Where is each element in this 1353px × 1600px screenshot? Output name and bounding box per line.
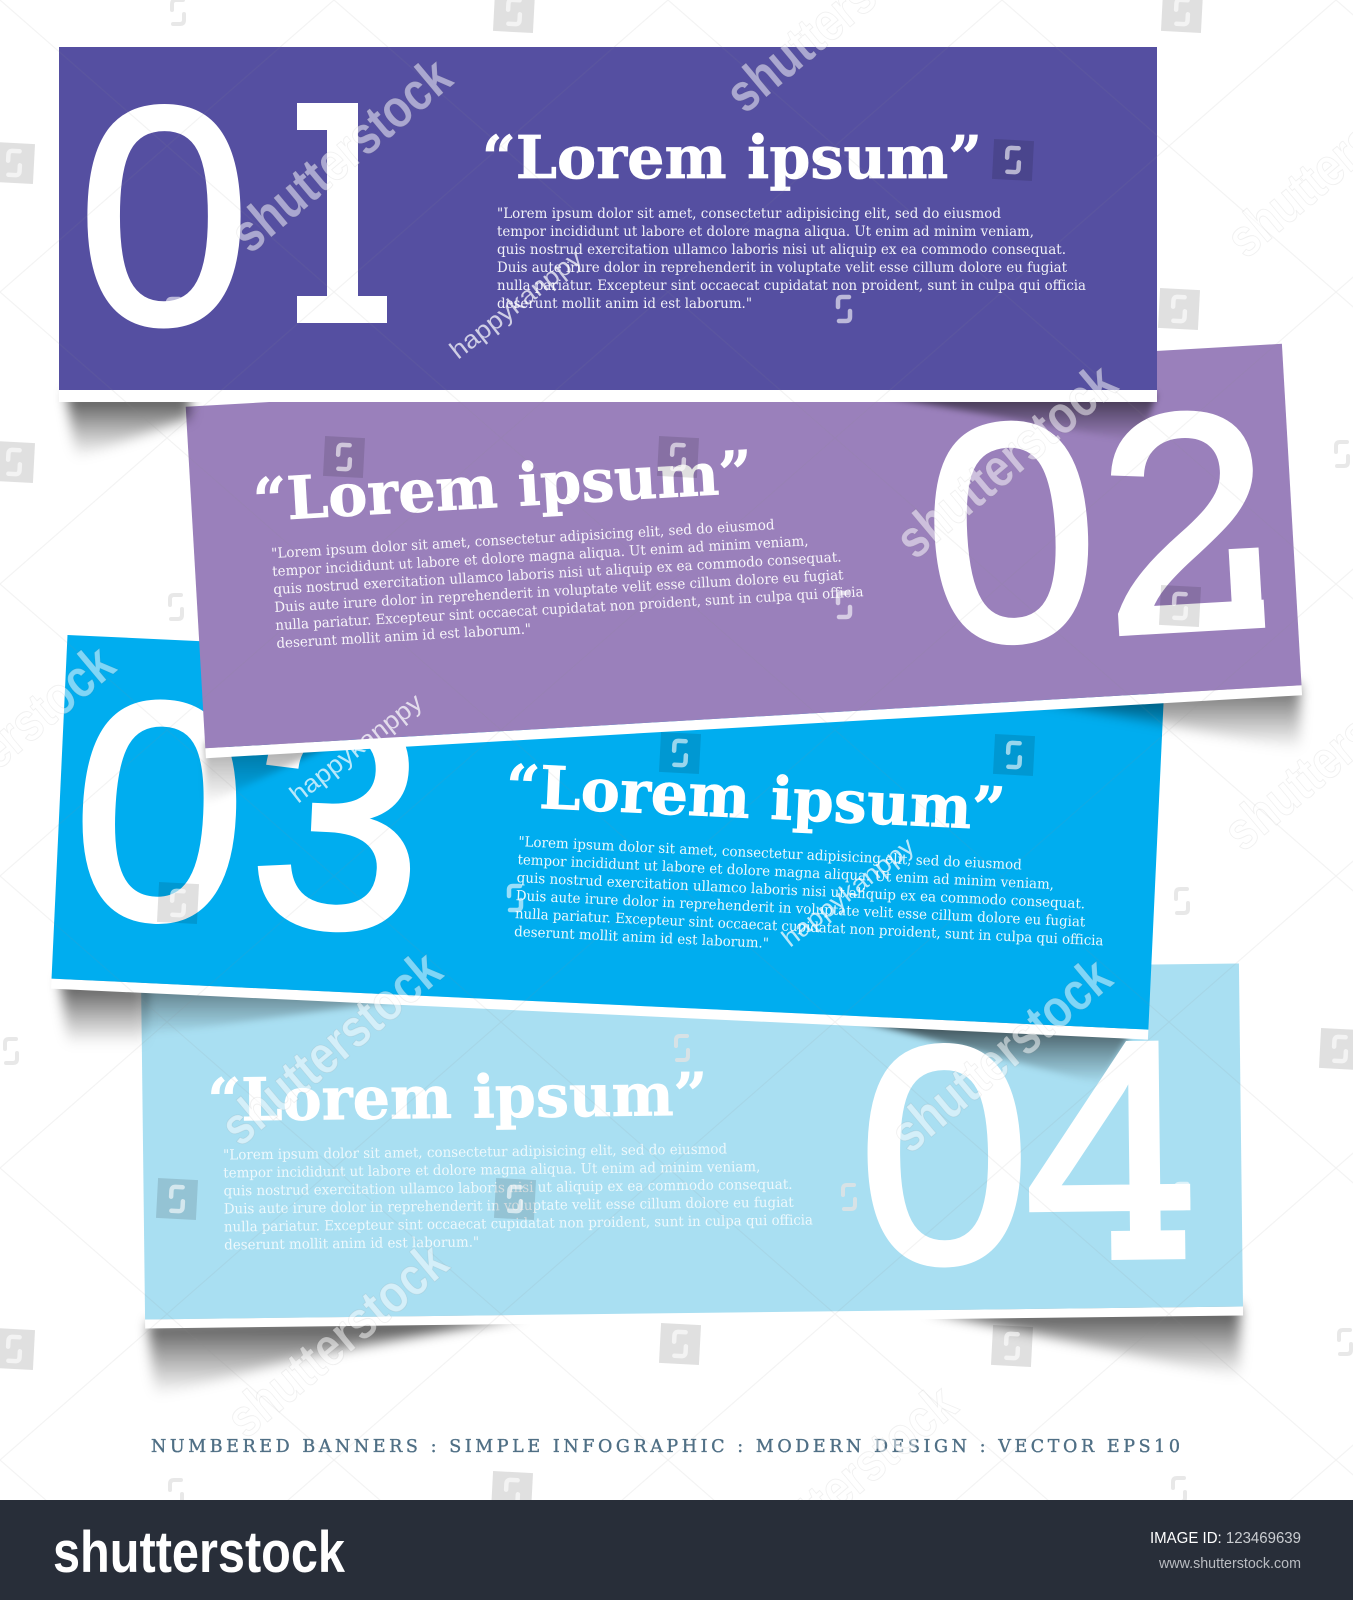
body text 04: nulla pariatur. Excepteur sint occaecat cupidatat non proident, sunt in culpa qui officia — [224, 1213, 813, 1236]
watermark: contributor name: happykanppy — [444, 244, 588, 365]
shadows beneath banner 1 — [66, 392, 190, 458]
body text 01 — [497, 206, 1086, 312]
watermark: shutterstock text: shutterstock — [879, 945, 1124, 1164]
body text 01: nulla pariatur. Excepteur sint occaecat cupidatat non proident, sunt in culpa qui officia — [497, 278, 1086, 294]
body text 03: tempor incididunt ut labore et dolore magna aliqua. Ut enim ad minim veniam, — [517, 852, 1054, 893]
panel: banner 04 — [141, 963, 1243, 1337]
heading 01: “Lorem ipsum” — [482, 123, 982, 192]
number 03: 0 — [65, 634, 254, 988]
body text 04: Duis aute irure dolor in reprehenderit in voluptate velit esse cillum dolore eu fugiat — [224, 1195, 794, 1218]
watermark: shutterstock text: shutterstock — [219, 45, 464, 264]
panel: banner 02 — [186, 343, 1302, 758]
body text 04: tempor incididunt ut labore et dolore magna aliqua. Ut enim ad minim veniam, — [223, 1159, 760, 1182]
body text 04: "Lorem ipsum dolor sit amet, consectetur adipisicing elit, sed do eiusmod — [223, 1142, 727, 1164]
watermark: shutterstock text: shutterstock — [724, 1372, 969, 1591]
body text 03: "Lorem ipsum dolor sit amet, consectetur adipisicing elit, sed do eiusmod — [518, 834, 1022, 874]
body text 03 — [514, 834, 1107, 967]
number 01: 1 — [325, 44, 359, 390]
body text 02: nulla pariatur. Excepteur sint occaecat cupidatat non proident, sunt in culpa qui officia — [275, 584, 864, 634]
website: www.shutterstock.com — [1158, 1556, 1301, 1572]
body text 04: quis nostrud exercitation ullamco laboris nisi ut aliquip ex ea commodo consequat. — [223, 1177, 793, 1200]
watermark: shutterstock text: shutterstock — [215, 1230, 460, 1449]
watermark: contributor name — [284, 244, 920, 953]
body text 02: "Lorem ipsum dolor sit amet, consectetur adipisicing elit, sed do eiusmod — [271, 517, 775, 562]
number 02: 0 — [915, 354, 1107, 710]
heading 04: “Lorem ipsum” — [207, 1060, 708, 1135]
number 04 — [856, 975, 1198, 1329]
number 03: 3 — [243, 642, 431, 997]
footer bar — [0, 1500, 1353, 1600]
watermark: contributor name: happykanppy — [776, 832, 920, 953]
shadows beneath banner 2 — [205, 684, 1300, 805]
footer logo: shutterstock — [53, 1520, 346, 1585]
panel: banner 03 — [51, 633, 1164, 1040]
body text 04: deserunt mollit anim id est laborum." — [224, 1235, 479, 1254]
shadows beneath banner 3 — [60, 978, 145, 1045]
body text 02: tempor incididunt ut labore et dolore magna aliqua. Ut enim ad minim veniam, — [272, 533, 809, 580]
watermark: contributor name: happykanppy — [284, 688, 428, 809]
number 01: 0 — [78, 42, 250, 389]
number 04: 0 — [856, 980, 1032, 1329]
body text 01: "Lorem ipsum dolor sit amet, consectetur adipisicing elit, sed do eiusmod — [497, 206, 1001, 222]
body text 02: deserunt mollit anim id est laborum." — [276, 621, 532, 652]
number 02 — [915, 344, 1282, 710]
heading 03: “Lorem ipsum” — [504, 752, 1007, 844]
watermark: shutterstock text: shutterstock — [884, 351, 1129, 570]
body text 03: Duis aute irure dolor in reprehenderit in voluptate velit esse cillum dolore eu fugiat — [515, 888, 1086, 931]
heading 02: “Lorem ipsum” — [251, 437, 754, 535]
number 03 — [65, 634, 431, 997]
number 02: 2 — [1090, 344, 1282, 700]
body text 02: Duis aute irure dolor in reprehenderit in voluptate velit esse cillum dolore eu fugiat — [274, 567, 844, 616]
body text 01: quis nostrud exercitation ullamco laboris nisi ut aliquip ex ea commodo consequat. — [497, 242, 1066, 258]
number 01 — [78, 42, 387, 390]
number 04: 4 — [1022, 975, 1198, 1324]
body text 01: tempor incididunt ut labore et dolore magna aliqua. Ut enim ad minim veniam, — [497, 224, 1034, 240]
caption: NUMBERED BANNERS : SIMPLE INFOGRAPHIC : MODERN DESIGN : VECTOR EPS10 — [151, 1437, 1180, 1457]
body text 02 — [271, 512, 865, 652]
body text 04 — [223, 1141, 813, 1254]
body text 02: quis nostrud exercitation ullamco laboris nisi ut aliquip ex ea commodo consequat. — [273, 549, 842, 598]
body text 03: nulla pariatur. Excepteur sint occaecat cupidatat non proident, sunt in culpa qui officia — [515, 906, 1104, 949]
body text 03: deserunt mollit anim id est laborum." — [514, 924, 769, 952]
body text 03: quis nostrud exercitation ullamco laboris nisi ut aliquip ex ea commodo consequat. — [516, 870, 1085, 913]
shadows beneath banner 4 — [148, 1306, 1240, 1396]
panel: banner 01 — [59, 42, 1157, 402]
body text 01: Duis aute irure dolor in reprehenderit in voluptate velit esse cillum dolore eu fugiat — [497, 260, 1067, 276]
watermark: shutterstock text: shutterstock — [209, 938, 454, 1157]
body text 01: deserunt mollit anim id est laborum." — [497, 296, 752, 312]
image id: IMAGE ID: 123469639 — [1150, 1530, 1301, 1547]
